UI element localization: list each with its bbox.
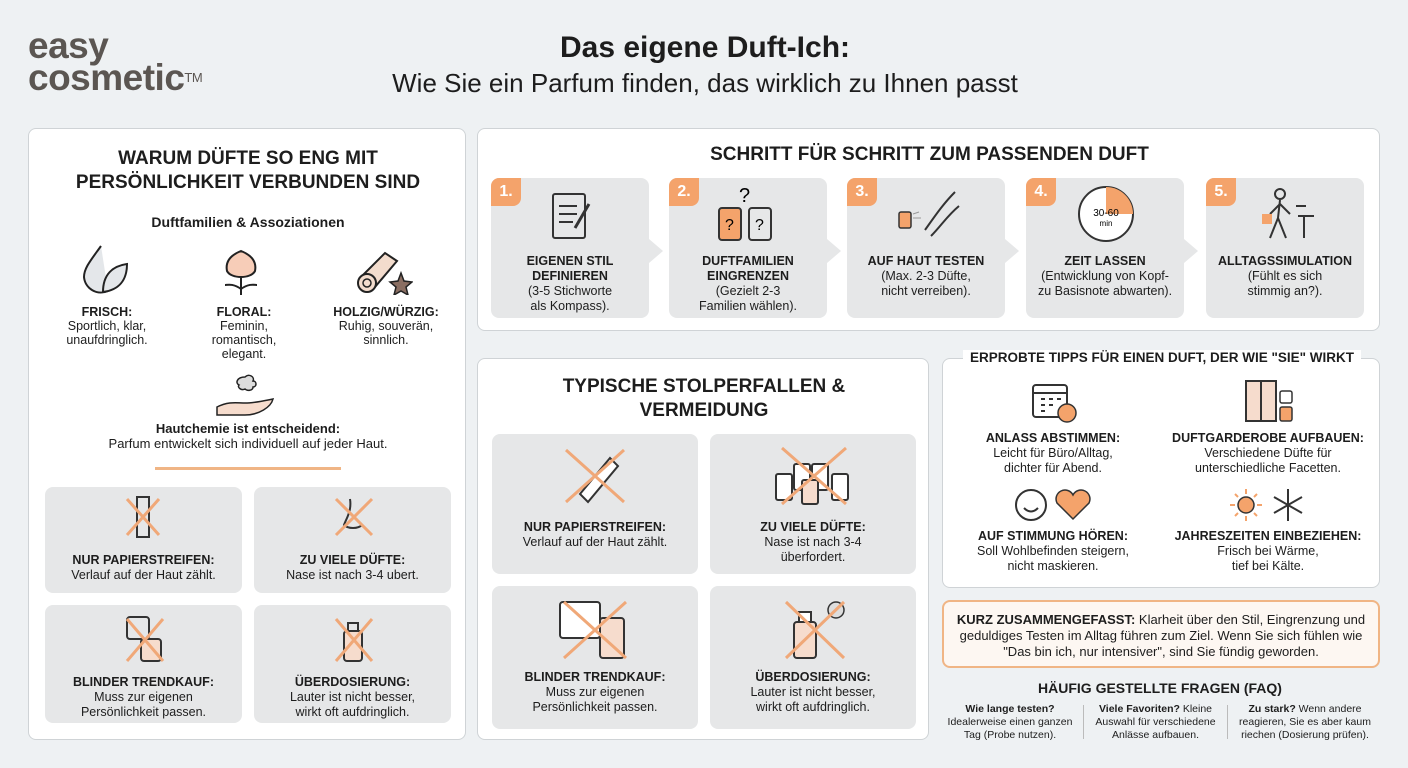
card: düfte: überfordert.: [781, 550, 845, 564]
text: holzig: Ruhig, souverän,: [339, 319, 433, 333]
heading: TYPISCHE STOLPERFALLEN &: [563, 376, 845, 397]
text: floral: romantisch,: [212, 333, 276, 347]
tip: stimmung: AUF STIMMUNG HÖREN:: [978, 529, 1128, 543]
step 2: DUFTFAMILIEN: [702, 254, 794, 268]
logo: easy: [28, 25, 108, 66]
heading: ERPROBTE TIPPS FÜR EINEN DUFT, DER WIE "SIE" WIRKT: [970, 350, 1354, 365]
card: papier: [492, 434, 698, 574]
card: trendkauf: Muss zur eigenen: [546, 685, 644, 699]
tip: garderobe: Verschiedene Düfte für: [1204, 446, 1332, 460]
text: frisch: Sportlich, klar,: [68, 319, 146, 333]
step 1: DEFINIEREN: [532, 269, 608, 283]
card: überdosierung: ÜBERDOSIERUNG:: [295, 675, 410, 689]
step 4: 4.: [1034, 183, 1048, 200]
tip: jahreszeiten: Frisch bei Wärme,: [1217, 544, 1319, 558]
card: trendkauf: BLINDER TRENDKAUF:: [73, 675, 214, 689]
step 3: (Max. 2-3 Düfte,: [881, 269, 971, 283]
step 3: AUF HAUT TESTEN: [868, 254, 984, 268]
card: überdosierung: wirkt oft aufdringlich.: [756, 700, 870, 714]
step 4: min: [1100, 219, 1112, 228]
heading: VERMEIDUNG: [640, 400, 768, 421]
card: trendkauf: Persönlichkeit passen.: [532, 700, 658, 714]
text: floral: FLORAL:: [217, 305, 271, 319]
step 2: Familien wählen).: [699, 299, 797, 313]
tip: garderobe: unterschiedliche Facetten.: [1195, 461, 1341, 475]
text: floral: Feminin,: [220, 319, 268, 333]
card: trendkauf: [45, 605, 242, 723]
step 2: EINGRENZEN: [707, 269, 789, 283]
tip: garderobe: DUFTGARDEROBE AUFBAUEN:: [1172, 431, 1364, 445]
text: frisch: FRISCH:: [82, 305, 132, 319]
card: papierstreifen: [45, 487, 242, 593]
FAQ 1: Idealerweise einen ganzen Tag (Probe nutzen).: [948, 716, 1072, 741]
step 4: [1026, 178, 1184, 318]
FAQ heading: HÄUFIG GESTELLTE FRAGEN (FAQ): [1038, 680, 1282, 696]
step 2: ?: [725, 217, 734, 234]
arrow: [1184, 239, 1198, 263]
step 5: stimmig an?).: [1247, 284, 1323, 298]
step 1: EIGENEN STIL: [527, 254, 613, 268]
text: holzig: sinnlich.: [363, 333, 409, 347]
step 4: (Entwicklung von Kopf-: [1041, 269, 1169, 283]
text: holzig: [333, 304, 439, 347]
tip: garderobe: [1172, 380, 1364, 475]
step 2: [669, 178, 827, 318]
arrow: [1005, 239, 1019, 263]
card: papierstreifen: NUR PAPIERSTREIFEN:: [72, 553, 215, 567]
callout: summary: [942, 600, 1380, 668]
FAQ 3: Zu stark? Wenn andere reagieren, Sie es aber kaum riechen (Dosierung prüfen).: [1239, 703, 1371, 741]
card: überdosierung: Lauter ist nicht besser,: [750, 685, 876, 699]
arrow: [649, 239, 663, 263]
step 2: (Gezielt 2-3: [716, 284, 780, 298]
heading: SCHRITT FÜR SCHRITT ZUM PASSENDEN DUFT: [710, 144, 1149, 165]
callout: summary: KURZ ZUSAMMENGEFASST: Klarheit über den Stil, Eingrenzung und geduldiges Testen im Alltag führen zum Ziel. Wenn Sie sich fühlen wie "Das bin ich, nur intensiver", sind Sie fündig geworden.: [957, 612, 1365, 659]
tip: anlass: dichter für Abend.: [1004, 461, 1102, 475]
step 5: [1206, 178, 1364, 318]
heading: WARUM DÜFTE SO ENG MIT: [118, 148, 378, 169]
card: papier: Verlauf auf der Haut zählt.: [523, 535, 667, 549]
card: zu viele: ZU VIELE DÜFTE:: [300, 553, 405, 567]
text: hautchemie: Parfum entwickelt sich individuell auf jeder Haut.: [109, 436, 387, 451]
card: trendkauf: [492, 586, 698, 729]
card: überdosierung: [254, 605, 451, 723]
panel: steps: [477, 128, 1380, 331]
title: Wie Sie ein Parfum finden, das wirklich zu Ihnen passt: [392, 68, 1018, 98]
card: papierstreifen: Verlauf auf der Haut zählt.: [71, 568, 216, 582]
FAQ: [948, 680, 1371, 741]
tip: stimmung: [977, 489, 1129, 573]
step 2: ?: [755, 217, 764, 234]
card: düfte: ZU VIELE DÜFTE:: [760, 520, 866, 534]
FAQ 2: Viele Favoriten? Kleine Auswahl für verschiedene Anlässe aufbauen.: [1095, 703, 1216, 741]
text: frisch: unaufdringlich.: [66, 333, 148, 347]
text: hautchemie: [109, 421, 387, 451]
step 3: [847, 178, 1005, 318]
step 3: nicht verreiben).: [881, 284, 971, 298]
title: Das eigene Duft-Ich:: [560, 31, 850, 64]
logo: cosmeticTM: [28, 57, 202, 98]
heading: [76, 147, 420, 193]
card: trendkauf: Muss zur eigenen: [94, 690, 193, 704]
icon: flower: [225, 250, 257, 295]
step 4: 30-60: [1093, 208, 1119, 219]
panel: tips: [942, 358, 1380, 588]
step 1: als Kompass).: [530, 299, 610, 313]
logo: [28, 25, 202, 98]
text: floral: elegant.: [222, 347, 266, 361]
text: floral: [212, 305, 276, 361]
card: überdosierung: wirkt oft aufdringlich.: [296, 705, 409, 719]
text: frisch: [66, 305, 148, 347]
FAQ 1: [948, 703, 1072, 741]
arrow: [827, 239, 841, 263]
step 1: (3-5 Stichworte: [528, 284, 612, 298]
step 1: 1.: [499, 183, 513, 200]
text: hautchemie: Hautchemie ist entscheidend:: [156, 421, 340, 436]
tip: anlass: Leicht für Büro/Alltag,: [993, 446, 1113, 460]
card: papier: NUR PAPIERSTREIFEN:: [524, 520, 666, 534]
card: überdosierung: Lauter ist nicht besser,: [290, 690, 415, 704]
tip: jahreszeiten: JAHRESZEITEN EINBEZIEHEN:: [1175, 529, 1361, 543]
icon: hand: [216, 374, 274, 416]
panel: pitfalls: [477, 358, 929, 740]
step 4: zu Basisnote abwarten).: [1038, 284, 1172, 298]
step 5: 5.: [1214, 183, 1228, 200]
heading: PERSÖNLICHKEIT VERBUNDEN SIND: [76, 172, 420, 193]
card: trendkauf: Persönlichkeit passen.: [81, 705, 206, 719]
step 5: (Fühlt es sich: [1248, 269, 1322, 283]
panel: personality: [28, 128, 466, 740]
subheading: Duftfamilien & Assoziationen: [151, 214, 345, 230]
tip: stimmung: Soll Wohlbefinden steigern,: [977, 544, 1129, 558]
heading: [562, 376, 845, 421]
card: trendkauf: BLINDER TRENDKAUF:: [525, 670, 665, 684]
tip: jahreszeiten: tief bei Kälte.: [1232, 559, 1304, 573]
step 3: 3.: [855, 183, 869, 200]
step 5: ALLTAGSSIMULATION: [1218, 254, 1352, 268]
icon: wood: [357, 252, 413, 295]
step 4: ZEIT LASSEN: [1064, 254, 1146, 268]
step 1: [491, 178, 649, 318]
FAQ 1: Wie lange testen?: [965, 703, 1055, 715]
icon: drop leaf: [83, 245, 128, 294]
card: überdosierung: [710, 586, 916, 729]
tip: anlass: ANLASS ABSTIMMEN:: [986, 431, 1120, 445]
card: zu viele: [254, 487, 451, 593]
card: überdosierung: ÜBERDOSIERUNG:: [755, 670, 871, 684]
text: holzig: HOLZIG/WÜRZIG:: [333, 305, 439, 319]
step 2: 2.: [677, 183, 691, 200]
card: zu viele: Nase ist nach 3-4 ubert.: [286, 568, 419, 582]
tip: jahreszeiten: [1174, 489, 1361, 573]
card: düfte: [710, 434, 916, 574]
card: düfte: Nase ist nach 3-4: [764, 535, 862, 549]
tip: anlass: [986, 384, 1120, 475]
tip: stimmung: nicht maskieren.: [1007, 559, 1098, 573]
title: [392, 31, 1018, 98]
